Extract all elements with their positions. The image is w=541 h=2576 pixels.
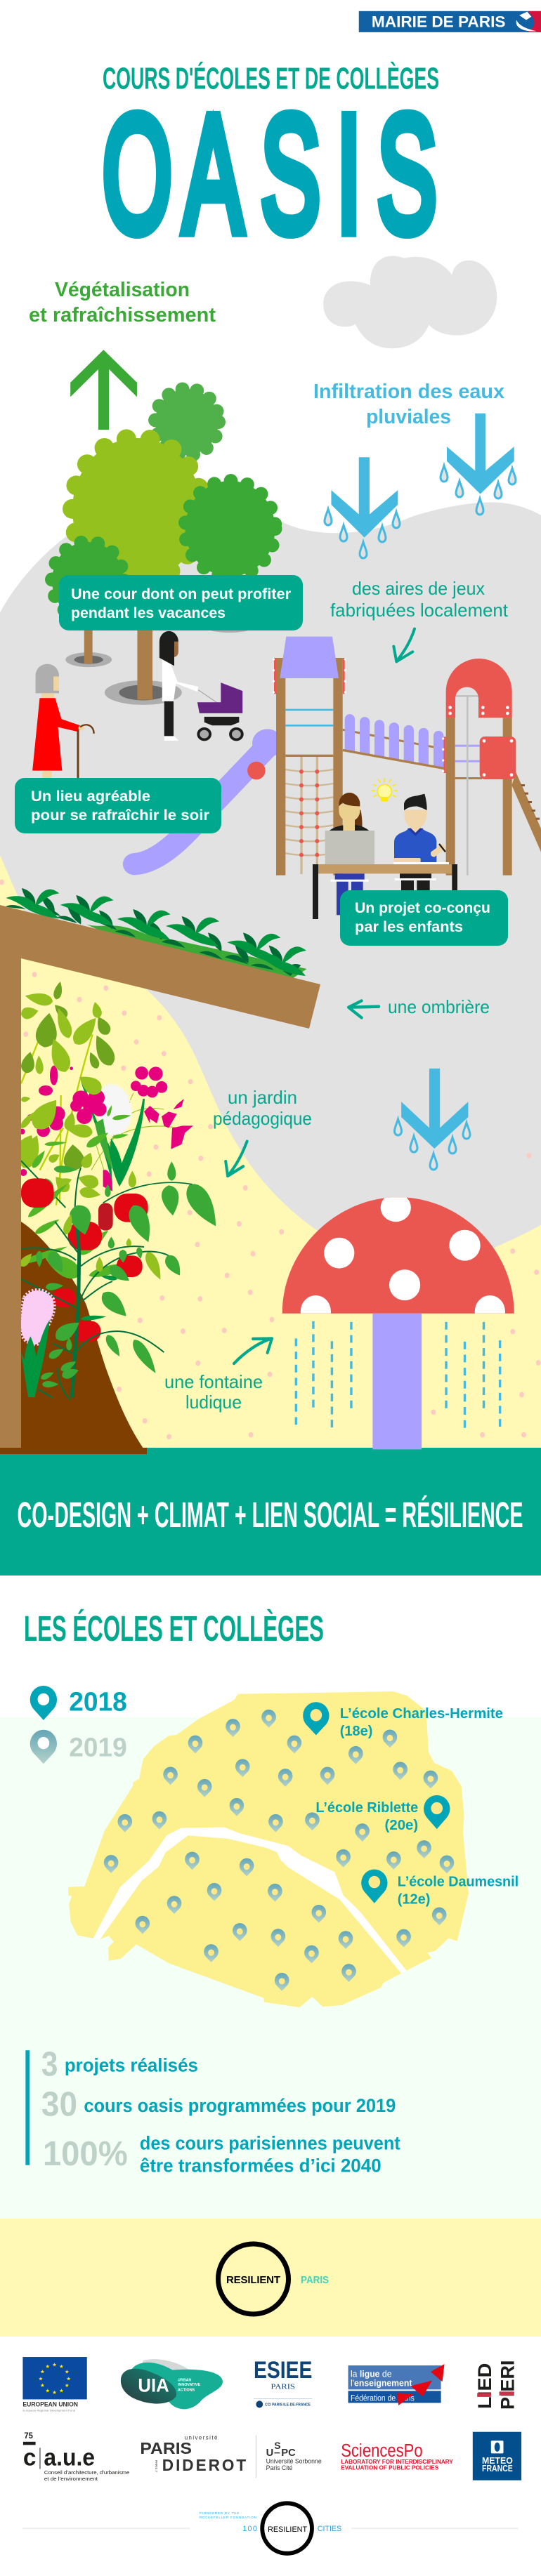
heading: végétalisation: et rafraîchissement bbox=[29, 304, 216, 326]
logo: European Union: ★ bbox=[45, 2363, 50, 2370]
stat: 30 cours: cours oasis programmées pour 2019 bbox=[84, 2095, 396, 2116]
map pin: Daumesnil: L’école Daumesnil bbox=[398, 1874, 519, 1890]
roof: ombrière bbox=[0, 905, 320, 1448]
logo: European Union: European Regional Development Fund bbox=[22, 2408, 75, 2412]
logo: Météo France bbox=[473, 2432, 521, 2481]
band: equation bbox=[0, 1448, 541, 1576]
logo: European Union: ★ bbox=[66, 2376, 71, 2382]
logo: La ligue de l'enseignement bbox=[348, 2364, 445, 2405]
map pin: Charles-Hermite: (18e) bbox=[340, 1724, 372, 1739]
logo: European Union: ★ bbox=[40, 2382, 45, 2389]
title: OASIS: OASIS bbox=[103, 81, 437, 267]
stat: 100%: 100% bbox=[43, 2134, 128, 2173]
stat: 3 projets bbox=[41, 2045, 198, 2084]
legend: years: 2018 bbox=[69, 1686, 127, 1717]
logo: Université Paris Diderot: DIDEROT bbox=[162, 2456, 246, 2474]
figure: grandmother with cane bbox=[32, 664, 94, 779]
callout: une cour: pendant les vacances bbox=[71, 605, 226, 621]
logo: European Union: ★ bbox=[65, 2369, 70, 2375]
logo: CAUE 75: et de l’environnement bbox=[44, 2476, 98, 2482]
band: Resilient Paris: RESILIENT bbox=[226, 2274, 280, 2286]
plant: tomatoes and lower foliage bbox=[18, 1178, 185, 1400]
logo: European Union: ★ bbox=[52, 2389, 57, 2396]
callout: une cour bbox=[59, 575, 303, 630]
figure: mushroom fountain bbox=[282, 1194, 514, 1432]
logo: European Union: ★ bbox=[65, 2382, 70, 2389]
legend: years: 2019 bbox=[69, 1732, 127, 1762]
logo: CAUE 75: c bbox=[23, 2444, 36, 2471]
stat: 30 cours bbox=[41, 2085, 396, 2123]
logo: Lied Pieri: LIED bbox=[474, 2363, 495, 2409]
section background: map bbox=[0, 1717, 541, 2219]
map pin: Daumesnil: (12e) bbox=[398, 1891, 430, 1908]
logo: CAUE 75: a.u.e bbox=[44, 2444, 95, 2471]
logo: European Union: EUROPEAN UNION bbox=[22, 2400, 78, 2408]
logo: European Union: ★ bbox=[52, 2362, 57, 2368]
arrow: to fountain bbox=[234, 1338, 272, 1363]
logo: UIA: ACTIONS bbox=[178, 2388, 195, 2392]
figure: playground bbox=[273, 637, 541, 876]
green roof plants bbox=[5, 888, 307, 978]
logo: USPC: U bbox=[266, 2448, 273, 2459]
mushroom stem bbox=[372, 1314, 422, 1449]
map pin: Riblette: L’école Riblette bbox=[315, 1800, 418, 1816]
handwritten label: une fontaine ludique: une fontaine bbox=[164, 1371, 263, 1392]
stat: 30 cours: 30 bbox=[41, 2085, 77, 2123]
stat: 100%: des cours parisiennes peuvent bbox=[140, 2132, 400, 2154]
logo: Sciences Po: LABORATORY FOR INTERDISCIPLINARY bbox=[341, 2458, 453, 2465]
heading: végétalisation: Végétalisation bbox=[55, 279, 190, 301]
logo: Météo France: FRANCE bbox=[482, 2464, 513, 2473]
callout: projet co-conçu: par les enfants bbox=[355, 919, 463, 935]
handwritten label: aires de jeux: des aires de jeux bbox=[352, 578, 485, 599]
logo: CAUE 75 bbox=[23, 2432, 129, 2482]
logo: ESIEE: ESIEE bbox=[254, 2357, 312, 2384]
logo: USPC bbox=[266, 2440, 322, 2471]
logo: UIA bbox=[121, 2359, 223, 2409]
logo: Lied Pieri: PIERI bbox=[497, 2360, 519, 2410]
logo: 100 Resilient Cities: PIONEERED BY THE bbox=[200, 2511, 239, 2515]
logo: USPC: S bbox=[274, 2440, 281, 2451]
map: Paris bbox=[68, 1691, 519, 2007]
plant: upper foliage and flowers bbox=[15, 981, 225, 1231]
icon: rain arrows bbox=[331, 414, 514, 538]
map pin: Daumesnil bbox=[361, 1869, 519, 1908]
logo: ESIEE: PARIS bbox=[271, 2383, 295, 2391]
legend: years bbox=[30, 1686, 127, 1764]
callout: un lieu agréable: Un lieu agréable bbox=[31, 788, 150, 805]
handwritten label: un jardin pédagogique: un jardin bbox=[228, 1087, 297, 1108]
handwritten label: un jardin pédagogique bbox=[213, 1087, 312, 1129]
arrow: to roof bbox=[348, 1000, 379, 1018]
band: Resilient Paris bbox=[0, 2219, 541, 2337]
logo: La ligue de l'enseignement: la ligue de bbox=[351, 2370, 392, 2379]
logo: Sciences Po: EVALUATION OF PUBLIC POLICIES bbox=[341, 2464, 439, 2471]
heading: infiltration des eaux: Infiltration des eaux bbox=[313, 381, 504, 403]
stat: 3 projets: 3 bbox=[41, 2045, 58, 2084]
handwritten label: une fontaine ludique: ludique bbox=[185, 1392, 242, 1413]
handwritten label: aires de jeux: fabriquées localement bbox=[330, 600, 509, 621]
map pins: 2019 schools bbox=[104, 1710, 454, 1991]
handwritten label: une ombrière: une ombrière bbox=[388, 996, 490, 1017]
heading: infiltration des eaux: pluviales bbox=[366, 406, 451, 428]
icon: drops above fountain bbox=[395, 1119, 470, 1170]
callout: un lieu agréable bbox=[15, 778, 221, 833]
callout: une cour: Une cour dont on peut profiter bbox=[71, 586, 291, 602]
icon: light bulb bbox=[372, 778, 398, 802]
trees bbox=[52, 389, 275, 705]
arrow: to garden bbox=[226, 1142, 247, 1176]
map pin: Riblette: (20e) bbox=[385, 1818, 418, 1833]
logo: 100 Resilient Cities: CITIES bbox=[318, 2525, 341, 2533]
figure: two children at a table bbox=[313, 793, 457, 919]
logo: CAUE 75: 75 bbox=[24, 2432, 34, 2440]
partner logos bbox=[22, 2357, 521, 2482]
logo: European Union bbox=[22, 2357, 87, 2412]
background: yellow garden bbox=[0, 855, 541, 1456]
logo: Lied Pieri bbox=[474, 2360, 519, 2410]
logo: 100 Resilient Cities bbox=[22, 2503, 519, 2554]
icon: rain drops bbox=[325, 465, 516, 558]
logo: Université Paris Diderot: université bbox=[185, 2434, 218, 2440]
logo: ESIEE bbox=[254, 2357, 312, 2407]
heading: infiltration des eaux bbox=[313, 381, 504, 428]
map pin: Riblette bbox=[315, 1795, 450, 1833]
logo: USPC: Université Sorbonne bbox=[266, 2457, 322, 2465]
map pin: Charles-Hermite: L’école Charles-Hermite bbox=[340, 1706, 503, 1722]
logo: UIA: URBAN bbox=[178, 2378, 191, 2382]
icon: green up arrow bbox=[70, 350, 137, 430]
logo: CAUE 75: Conseil d’architecture, d’urbanisme bbox=[44, 2469, 129, 2476]
stats bbox=[25, 2045, 400, 2176]
handwritten label: une fontaine ludique bbox=[164, 1371, 263, 1413]
logo: Université Paris Diderot bbox=[140, 2434, 256, 2478]
icon: cloud bbox=[323, 256, 497, 348]
logo: Université Paris Diderot: PARIS bbox=[140, 2439, 192, 2457]
figure: slide bbox=[135, 729, 282, 864]
callout: projet co-conçu bbox=[340, 890, 508, 946]
soil bbox=[0, 1208, 147, 1455]
logo: UIA: INNOVATIVE bbox=[178, 2383, 200, 2387]
logo: UIA: UIA bbox=[138, 2374, 169, 2396]
logo: 100 Resilient Cities: RESILIENT bbox=[268, 2525, 307, 2534]
logo: ESIEE: CCI PARIS ILE-DE-FRANCE bbox=[265, 2403, 311, 2407]
callout: projet co-conçu: Un projet co-conçu bbox=[355, 900, 490, 916]
logo: Sciences Po bbox=[341, 2441, 453, 2471]
stat: 100% bbox=[43, 2132, 400, 2176]
band: Resilient Paris: PARIS bbox=[301, 2274, 329, 2286]
figure: woman with stroller bbox=[159, 631, 244, 741]
logo: European Union: ★ bbox=[40, 2369, 45, 2375]
logo: USPC: PC bbox=[281, 2448, 296, 2459]
logo: European Union: ★ bbox=[45, 2387, 50, 2393]
arrow: to playground bbox=[393, 629, 415, 661]
background: grey ground bbox=[0, 502, 541, 1403]
logo: European Union: ★ bbox=[59, 2363, 64, 2370]
logo: 100 Resilient Cities: ROCKEFELLER FOUNDATION bbox=[200, 2516, 256, 2519]
logo: La ligue de l'enseignement: l'enseignement bbox=[351, 2378, 412, 2388]
heading: végétalisation bbox=[29, 279, 216, 326]
logo: Université Paris Diderot: PARIS 7 bbox=[155, 2460, 158, 2472]
map pin: Charles-Hermite bbox=[303, 1702, 503, 1739]
logo: La ligue de l'enseignement: Fédération de Paris bbox=[351, 2394, 415, 2403]
logo: USPC: Paris Cité bbox=[266, 2464, 292, 2471]
handwritten label: un jardin pédagogique: pédagogique bbox=[213, 1108, 312, 1129]
handwritten label: aires de jeux bbox=[330, 578, 509, 621]
logo: 100 Resilient Cities: 100 bbox=[242, 2525, 257, 2533]
icon: rain arrow above fountain bbox=[401, 1069, 468, 1149]
logo: European Union: ★ bbox=[39, 2376, 43, 2382]
logo: European Union: ★ bbox=[59, 2387, 64, 2393]
stat: 3 projets: projets réalisés bbox=[65, 2054, 198, 2076]
callout: un lieu agréable: pour se rafraîchir le soir bbox=[31, 807, 209, 824]
heading: les écoles et collèges: LES ÉCOLES ET COLLÈGES bbox=[24, 1609, 324, 1649]
logo: Météo France: METEO bbox=[482, 2456, 513, 2466]
logo: Sciences Po: SciencesPo bbox=[341, 2441, 423, 2461]
logo: Mairie de Paris: MAIRIE DE PARIS bbox=[372, 13, 505, 31]
stat: 100%: être transformées d’ici 2040 bbox=[140, 2155, 382, 2176]
